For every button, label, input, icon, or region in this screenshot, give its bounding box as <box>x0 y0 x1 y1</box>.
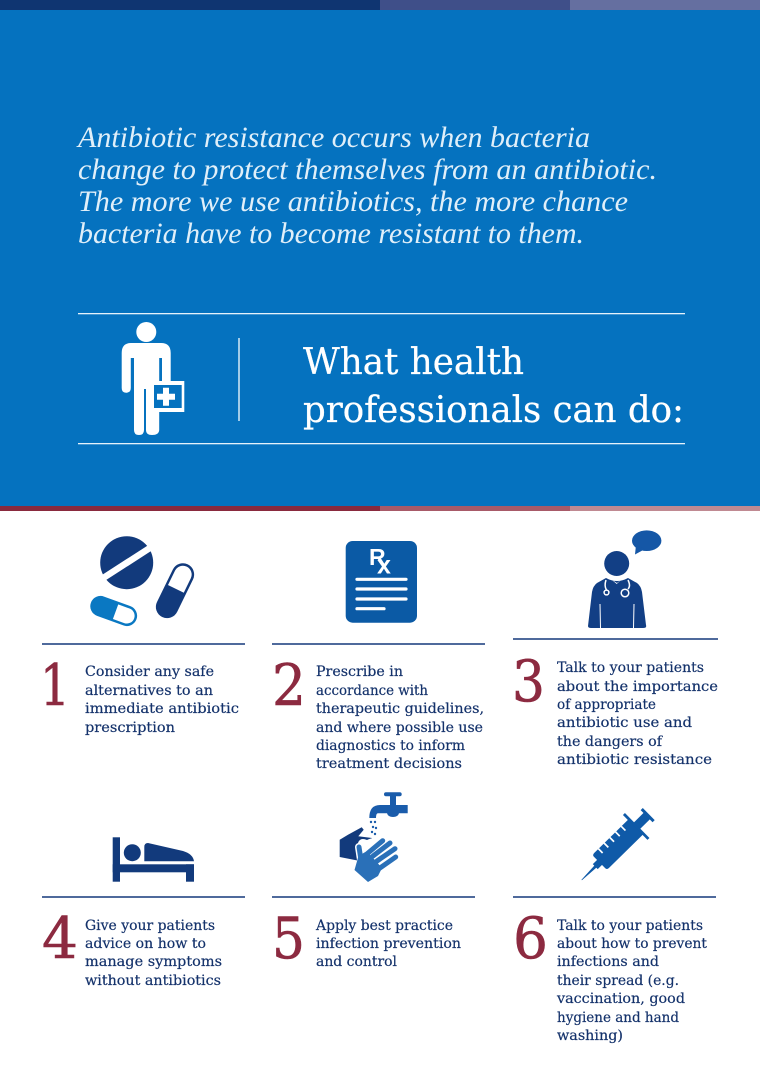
icon: prescription: x <box>377 552 391 580</box>
step 3 text: antibiotic use and <box>557 715 692 731</box>
step 6 text: vaccination, good <box>556 991 685 1007</box>
step 2 text: Prescribe in <box>316 664 403 680</box>
step 1 <box>40 536 245 736</box>
heading <box>303 342 684 431</box>
step 5 text: and control <box>316 954 397 970</box>
number 3: 3 <box>512 649 545 715</box>
number 2: 2 <box>272 653 306 719</box>
icon: doctor with speech bubble <box>588 530 661 628</box>
number 6: 6 <box>513 906 548 972</box>
step 1 text: alternatives to an <box>85 683 213 699</box>
step 5 text: Apply best practice <box>315 918 453 934</box>
intro text: bacteria have to become resistant to them. <box>78 217 584 250</box>
step 4 text: advice on how to <box>85 936 206 952</box>
icon: syringe <box>569 802 661 892</box>
step 4 <box>42 837 245 989</box>
heading: professionals can do: <box>303 390 684 431</box>
step 6 text: their spread (e.g. <box>557 973 679 989</box>
icon: prescription <box>346 541 417 623</box>
step 4 text: Give your patients <box>85 918 215 934</box>
step 4 text: manage symptoms <box>85 954 222 970</box>
icon: prescription: R <box>369 544 386 570</box>
icon: bed <box>113 837 194 882</box>
step 3 text: about the importance <box>557 679 718 695</box>
step 5 <box>272 792 475 972</box>
step 6 text: Talk to your patients <box>557 918 703 934</box>
step 3 text: the dangers of <box>557 734 663 750</box>
icon: hand washing under tap <box>340 792 408 882</box>
step 2 text: therapeutic guidelines, <box>316 701 484 717</box>
step 2 <box>272 541 485 772</box>
step 4 text: without antibiotics <box>85 973 221 989</box>
icon: pills <box>89 536 196 627</box>
intro text: Antibiotic resistance occurs when bacteria <box>76 121 590 154</box>
icon: health professional with first aid case <box>122 322 184 435</box>
step 1 text: prescription <box>85 720 175 736</box>
step 3 text: antibiotic resistance <box>557 752 712 768</box>
step 2 text <box>316 664 484 772</box>
intro text <box>76 121 657 250</box>
step 1 text: Consider any safe <box>85 664 214 680</box>
step 3 text <box>557 660 718 768</box>
step 6 text: hygiene and hand <box>557 1010 679 1026</box>
step 5 text <box>315 918 461 970</box>
intro text: The more we use antibiotics, the more chance <box>78 185 628 218</box>
step 3 <box>512 530 718 768</box>
step 6 text <box>556 918 707 1044</box>
step 3 text: of appropriate <box>557 697 656 713</box>
panel: blue header <box>0 0 760 511</box>
heading: What health <box>303 342 524 383</box>
step 2 text: accordance with <box>316 683 428 699</box>
step 6 text: infections and <box>557 954 659 970</box>
step 2 text: treatment decisions <box>316 756 462 772</box>
step 6 text: about how to prevent <box>557 936 707 952</box>
number 1: 1 <box>40 653 70 719</box>
step 3 text: Talk to your patients <box>557 660 704 676</box>
step 5 text: infection prevention <box>316 936 461 952</box>
step 4 text <box>85 918 222 989</box>
intro text: change to protect themselves from an antibiotic. <box>78 153 657 186</box>
step 6 <box>513 802 716 1044</box>
step 6 text: washing) <box>557 1028 623 1044</box>
step 1 text: immediate antibiotic <box>85 701 239 717</box>
number 5: 5 <box>272 906 305 972</box>
step 1 text <box>85 664 239 736</box>
step 2 text: and where possible use <box>316 720 483 736</box>
number 4: 4 <box>42 906 78 972</box>
step 2 text: diagnostics to inform <box>316 738 465 754</box>
